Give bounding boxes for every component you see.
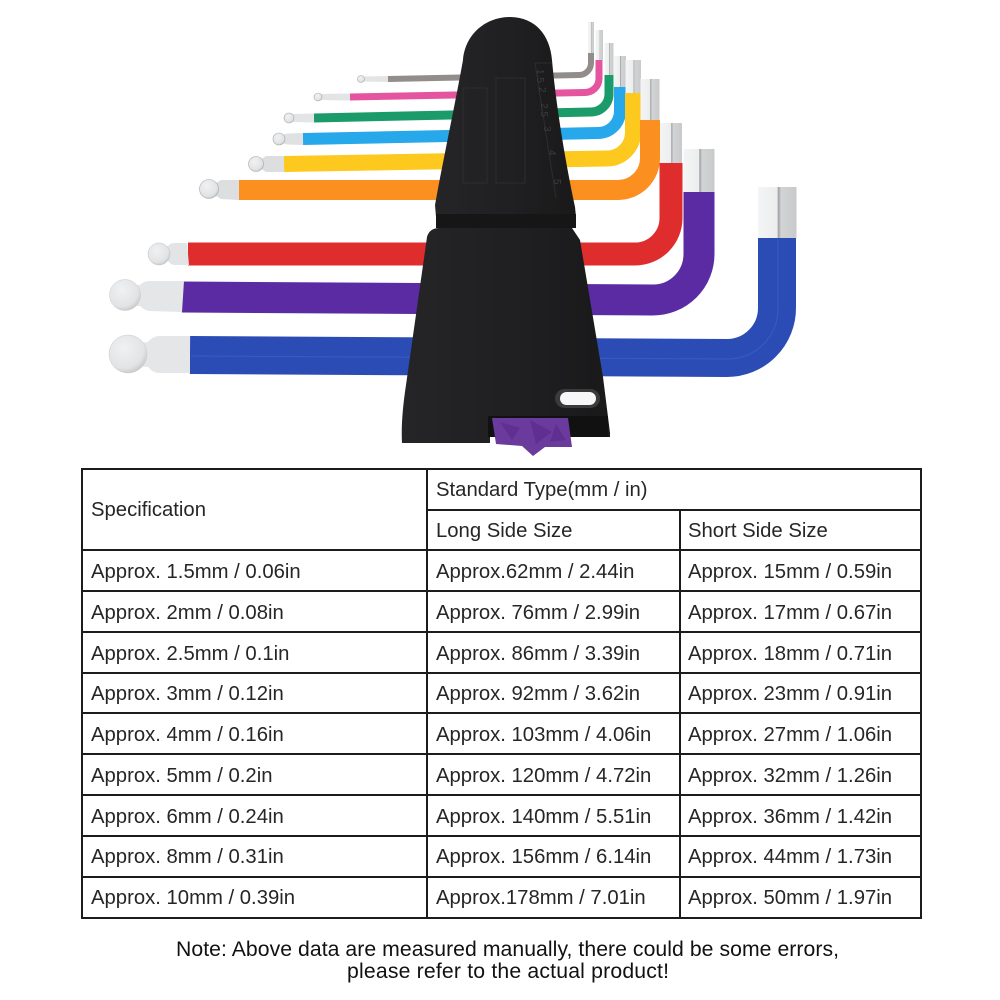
holder size labels: 2.5 <box>538 103 549 117</box>
row: 6mm: Approx. 6mm / 0.24in <box>91 806 284 828</box>
row: 4mm: Approx. 27mm / 1.06in <box>688 724 892 746</box>
table grid <box>82 469 921 918</box>
row: 2mm: Approx. 76mm / 2.99in <box>436 602 640 624</box>
key: 10mm blue <box>109 187 796 373</box>
row: 6mm: Approx. 36mm / 1.42in <box>688 806 892 828</box>
row: 2mm: Approx. 17mm / 0.67in <box>688 602 892 624</box>
holder size labels: 2 <box>536 87 547 93</box>
row: 4mm: Approx. 103mm / 4.06in <box>436 724 651 746</box>
key: 1.5mm gray <box>358 22 594 82</box>
row: 1.5mm: Approx.62mm / 2.44in <box>436 561 634 583</box>
row: 3mm: Approx. 3mm / 0.12in <box>91 683 284 705</box>
product photo: hex key set <box>109 17 796 456</box>
holder size labels: 5 <box>551 179 562 185</box>
row: 2.5mm: Approx. 18mm / 0.71in <box>688 643 892 665</box>
row: 5mm <box>91 765 892 787</box>
row: 1.5mm <box>91 561 892 583</box>
row: 2.5mm: Approx. 2.5mm / 0.1in <box>91 643 289 665</box>
row: 10mm: Approx. 50mm / 1.97in <box>688 887 892 909</box>
key: 8mm purple <box>110 149 714 312</box>
row: 8mm: Approx. 156mm / 6.14in <box>436 846 651 868</box>
key: 6mm red <box>148 123 682 265</box>
holder body <box>402 17 610 456</box>
holder clip base <box>488 416 608 437</box>
header: short side size: Short Side Size <box>688 520 828 542</box>
row: 2.5mm <box>91 643 892 665</box>
note: please refer to the actual product! <box>347 960 669 983</box>
row: 8mm <box>91 846 892 868</box>
holder size labels <box>534 69 562 185</box>
row: 6mm: Approx. 140mm / 5.51in <box>436 806 651 828</box>
row: 10mm: Approx.178mm / 7.01in <box>436 887 646 909</box>
header: long side size: Long Side Size <box>436 520 572 542</box>
row: 5mm: Approx. 120mm / 4.72in <box>436 765 651 787</box>
row: 2.5mm: Approx. 86mm / 3.39in <box>436 643 640 665</box>
row: 2mm <box>91 602 892 624</box>
row: 6mm <box>91 806 892 828</box>
row: 1.5mm: Approx. 1.5mm / 0.06in <box>91 561 301 583</box>
row: 5mm: Approx. 32mm / 1.26in <box>688 765 892 787</box>
key: 2mm pink <box>314 30 603 101</box>
key: 5mm orange <box>200 79 660 200</box>
row: 8mm: Approx. 44mm / 1.73in <box>688 846 892 868</box>
row: 3mm <box>91 683 892 705</box>
row: 4mm <box>91 724 892 746</box>
row: 3mm: Approx. 92mm / 3.62in <box>436 683 640 705</box>
key: 4mm yellow <box>248 60 641 172</box>
header: standard type: Standard Type(mm / in) <box>436 479 648 501</box>
note: Note: Above data are measured manually, there could be some errors, <box>176 938 839 961</box>
row: 2mm: Approx. 2mm / 0.08in <box>91 602 284 624</box>
holder hanging hole <box>555 389 600 408</box>
row: 10mm <box>91 887 892 909</box>
row: 5mm: Approx. 5mm / 0.2in <box>91 765 272 787</box>
row: 4mm: Approx. 4mm / 0.16in <box>91 724 284 746</box>
header: specification: Specification <box>91 499 206 521</box>
row: 3mm: Approx. 23mm / 0.91in <box>688 683 892 705</box>
holder size labels: 3 <box>541 126 552 132</box>
key: 2.5mm green <box>284 43 614 123</box>
specification table <box>82 469 921 918</box>
holder size grooves <box>463 63 556 198</box>
row: 10mm: Approx. 10mm / 0.39in <box>91 887 295 909</box>
row: 1.5mm: Approx. 15mm / 0.59in <box>688 561 892 583</box>
purple clip <box>492 418 572 456</box>
holder size labels: 1.5 <box>534 69 545 83</box>
note <box>176 938 839 983</box>
key: 3mm sky blue <box>273 56 626 145</box>
holder size labels: 4 <box>546 150 557 156</box>
row: 8mm: Approx. 8mm / 0.31in <box>91 846 284 868</box>
